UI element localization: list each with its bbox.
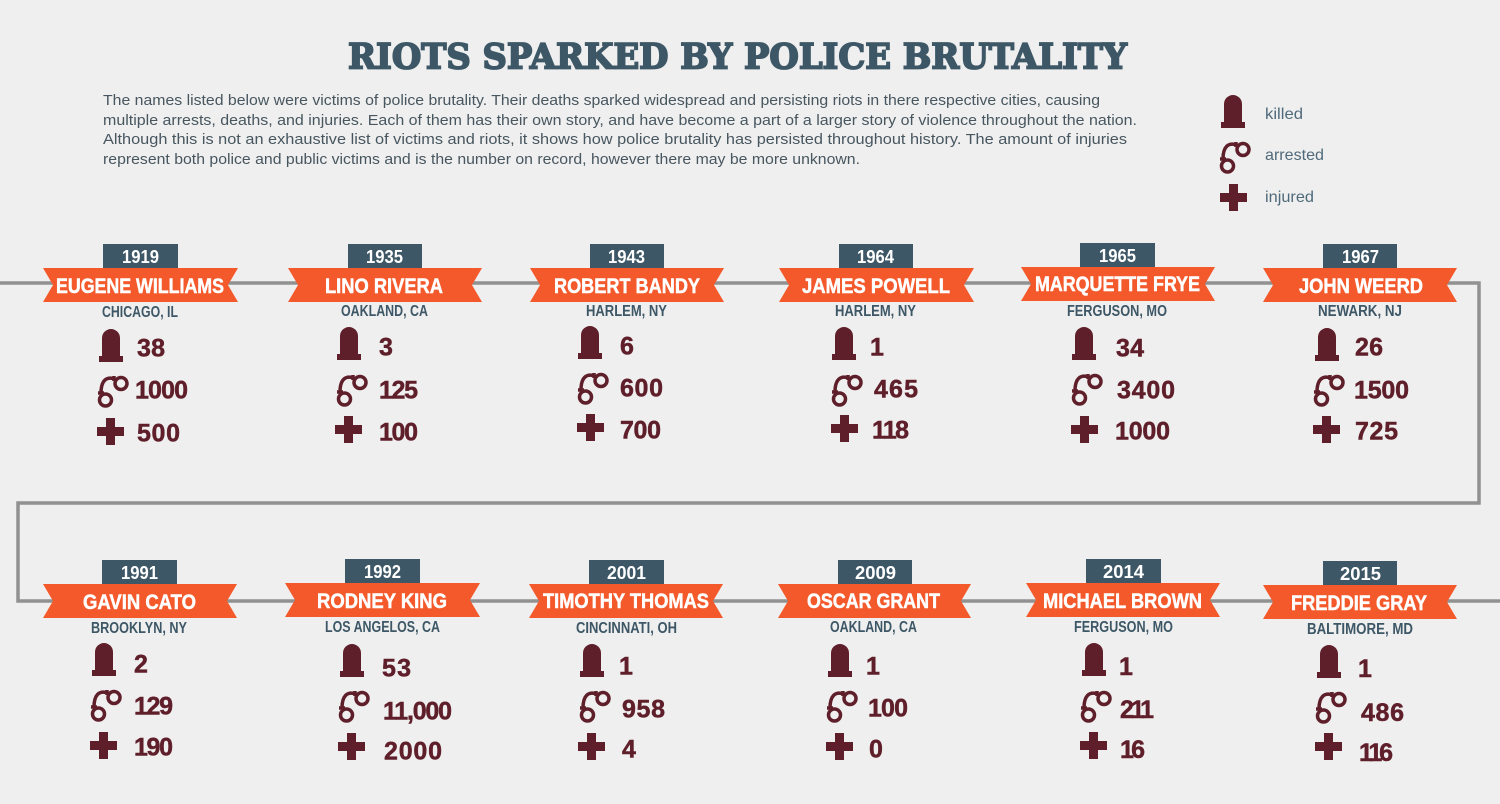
city: BALTIMORE, MD bbox=[1307, 621, 1413, 638]
city: OAKLAND, CA bbox=[830, 619, 917, 636]
injured count: 118 bbox=[872, 416, 909, 444]
killed icon bbox=[99, 329, 123, 362]
name ribbon bbox=[530, 268, 724, 302]
legend icon: killed bbox=[1221, 95, 1245, 128]
injured count: 116 bbox=[1359, 739, 1393, 767]
year tab bbox=[1323, 244, 1397, 268]
legend label: arrested: arrested bbox=[1265, 147, 1324, 164]
name ribbon bbox=[779, 268, 974, 302]
killed icon bbox=[1072, 327, 1096, 360]
year: 1967 bbox=[1342, 247, 1379, 267]
arrested count: 958 bbox=[622, 696, 665, 724]
city: FERGUSON, MO bbox=[1067, 303, 1167, 320]
killed count: 38 bbox=[137, 334, 165, 362]
legend label: injured: injured bbox=[1265, 189, 1314, 206]
year tab bbox=[1080, 243, 1155, 267]
intro paragraph: The names listed below were victims of police brutality. Their deaths sparked widespread and persisting riots in there respective cities, causing bbox=[103, 93, 1100, 109]
arrested icon bbox=[98, 376, 127, 406]
city: HARLEM, NY bbox=[835, 303, 917, 320]
injured icon bbox=[826, 733, 853, 760]
name: MARQUETTE FRYE bbox=[1035, 273, 1200, 296]
city: OAKLAND, CA bbox=[341, 303, 428, 320]
year: 2014 bbox=[1103, 562, 1144, 582]
arrested count: 100 bbox=[868, 694, 908, 722]
city: NEWARK, NJ bbox=[1318, 303, 1402, 320]
name: JAMES POWELL bbox=[802, 275, 950, 298]
card: Lino Rivera 1935 bbox=[288, 244, 482, 446]
killed icon bbox=[92, 643, 116, 676]
year: 1992 bbox=[364, 562, 401, 582]
killed count: 34 bbox=[1116, 334, 1144, 362]
year tab bbox=[590, 244, 664, 268]
year tab bbox=[839, 244, 913, 268]
name ribbon bbox=[1263, 268, 1457, 302]
arrested count: 1000 bbox=[135, 376, 188, 404]
arrested count: 129 bbox=[134, 692, 173, 720]
arrested icon bbox=[1072, 374, 1101, 404]
card: Michael Brown 2014 bbox=[1026, 559, 1220, 764]
city: LOS ANGELOS, CA bbox=[325, 619, 440, 636]
killed count: 26 bbox=[1355, 334, 1383, 362]
arrested icon bbox=[827, 691, 856, 721]
year tab bbox=[838, 560, 912, 584]
legend icon: injured bbox=[1220, 184, 1247, 211]
name: RODNEY KING bbox=[317, 590, 447, 613]
killed count: 1 bbox=[1119, 653, 1133, 681]
killed icon bbox=[340, 644, 364, 677]
card: James Powell 1964 bbox=[779, 244, 974, 444]
killed count: 3 bbox=[379, 334, 393, 362]
killed icon bbox=[1315, 328, 1339, 361]
arrested icon bbox=[580, 691, 609, 721]
name ribbon bbox=[1021, 267, 1215, 301]
legend icon: arrested bbox=[1220, 142, 1249, 172]
city: HARLEM, NY bbox=[586, 303, 668, 320]
name ribbon bbox=[1263, 585, 1457, 619]
name: OSCAR GRANT bbox=[807, 590, 940, 613]
killed count: 6 bbox=[620, 332, 634, 360]
card: Freddie Gray 2015 bbox=[1263, 561, 1457, 767]
arrested count: 125 bbox=[379, 376, 418, 404]
killed count: 1 bbox=[619, 652, 633, 680]
city: CINCINNATI, OH bbox=[576, 620, 677, 637]
legend label: killed: killed bbox=[1265, 106, 1303, 123]
injured count: 500 bbox=[137, 420, 180, 448]
killed icon bbox=[1082, 643, 1106, 676]
injured icon bbox=[578, 733, 605, 760]
year: 1991 bbox=[121, 563, 158, 583]
arrested icon bbox=[832, 375, 861, 405]
arrested icon bbox=[578, 373, 607, 403]
arrested count: 211 bbox=[1120, 696, 1154, 724]
injured count: 16 bbox=[1120, 736, 1145, 764]
arrested count: 486 bbox=[1361, 699, 1404, 727]
injured icon bbox=[338, 733, 365, 760]
injured icon bbox=[1315, 733, 1342, 760]
arrested icon bbox=[91, 690, 120, 720]
name: ROBERT BANDY bbox=[554, 275, 700, 298]
name: GAVIN CATO bbox=[83, 591, 196, 614]
arrested count: 1500 bbox=[1354, 376, 1409, 404]
intro paragraph: Although this is not an exhaustive list of victims and riots, it shows how police brutality has persisted throughout history. The amount of injuries bbox=[103, 132, 1127, 148]
year: 1919 bbox=[122, 247, 159, 267]
arrested icon bbox=[1314, 375, 1343, 405]
killed icon bbox=[832, 327, 856, 360]
killed count: 2 bbox=[134, 650, 148, 678]
legend bbox=[1220, 95, 1324, 211]
timeline connector line bbox=[0, 283, 1500, 601]
arrested icon bbox=[339, 691, 368, 721]
name ribbon bbox=[778, 584, 971, 618]
year tab bbox=[1323, 561, 1397, 585]
card: John Weerd 1967 bbox=[1263, 244, 1457, 446]
killed icon bbox=[1317, 645, 1341, 678]
card: Oscar Grant 2009 bbox=[778, 560, 971, 764]
year tab bbox=[345, 559, 420, 583]
killed count: 53 bbox=[382, 654, 411, 682]
arrested icon bbox=[337, 375, 366, 405]
year: 1965 bbox=[1099, 246, 1136, 266]
year tab bbox=[103, 244, 178, 268]
killed count: 1 bbox=[870, 334, 884, 362]
city: BROOKLYN, NY bbox=[91, 620, 188, 637]
arrested count: 11,000 bbox=[383, 698, 452, 726]
injured count: 100 bbox=[379, 418, 418, 446]
name: LINO RIVERA bbox=[325, 275, 443, 298]
city: FERGUSON, MO bbox=[1074, 619, 1173, 636]
city: CHICAGO, IL bbox=[102, 304, 178, 321]
killed icon bbox=[337, 327, 361, 360]
name ribbon bbox=[1026, 583, 1220, 617]
card: Robert Bandy 1943 bbox=[530, 244, 724, 444]
year: 1943 bbox=[608, 247, 645, 267]
killed count: 1 bbox=[866, 652, 880, 680]
injured icon bbox=[831, 415, 858, 442]
year: 2001 bbox=[607, 563, 646, 583]
injured icon bbox=[577, 414, 604, 441]
year tab bbox=[1086, 559, 1161, 583]
injured icon bbox=[90, 732, 117, 759]
injured icon bbox=[335, 416, 362, 443]
injured count: 0 bbox=[869, 736, 883, 764]
intro paragraph bbox=[103, 93, 1137, 168]
injured count: 4 bbox=[622, 736, 636, 764]
name: TIMOTHY THOMAS bbox=[543, 590, 709, 613]
year: 2009 bbox=[855, 563, 896, 583]
injured icon bbox=[1071, 416, 1098, 443]
name ribbon bbox=[529, 584, 723, 618]
name ribbon bbox=[285, 583, 480, 617]
name ribbon bbox=[43, 584, 237, 618]
injured icon bbox=[97, 418, 124, 445]
arrested count: 465 bbox=[874, 376, 918, 404]
year: 1964 bbox=[857, 247, 894, 267]
card: Rodney King 1992 bbox=[285, 559, 480, 766]
arrested count: 3400 bbox=[1117, 376, 1175, 404]
injured count: 190 bbox=[134, 734, 173, 762]
name: JOHN WEERD bbox=[1299, 275, 1423, 298]
killed icon bbox=[580, 644, 604, 677]
title: RIOTS SPARKED BY POLICE BRUTALITY bbox=[348, 36, 1128, 78]
arrested count: 600 bbox=[620, 374, 663, 402]
year: 1935 bbox=[366, 247, 403, 267]
name ribbon bbox=[43, 268, 238, 302]
name: EUGENE WILLIAMS bbox=[56, 275, 224, 298]
card: Timothy Thomas 2001 bbox=[529, 560, 723, 764]
name: FREDDIE GRAY bbox=[1291, 592, 1427, 615]
injured icon bbox=[1080, 732, 1107, 759]
injured count: 725 bbox=[1355, 418, 1398, 446]
card: Gavin Cato 1991 bbox=[43, 560, 237, 762]
name: MICHAEL BROWN bbox=[1043, 590, 1202, 613]
injured count: 1000 bbox=[1115, 418, 1170, 446]
injured icon bbox=[1313, 416, 1340, 443]
killed icon bbox=[578, 326, 602, 359]
killed icon bbox=[828, 644, 852, 677]
arrested icon bbox=[1316, 692, 1345, 722]
year tab bbox=[102, 560, 177, 584]
year: 2015 bbox=[1340, 564, 1381, 584]
name ribbon bbox=[288, 268, 482, 302]
year tab bbox=[589, 560, 664, 584]
intro paragraph: multiple arrests, deaths, and injuries. Each of them has their own story, and have become a part of a larger story of violence throughout the nation. bbox=[103, 113, 1137, 129]
injured count: 700 bbox=[620, 416, 661, 444]
arrested icon bbox=[1081, 691, 1110, 721]
intro paragraph: represent both police and public victims and is the number on record, however there may be more unknown. bbox=[103, 152, 860, 168]
killed count: 1 bbox=[1358, 655, 1372, 683]
injured count: 2000 bbox=[384, 738, 442, 766]
year tab bbox=[348, 244, 422, 268]
card: Eugene Williams 1919 bbox=[43, 244, 238, 448]
card: Marquette Frye 1965 bbox=[1021, 243, 1215, 446]
